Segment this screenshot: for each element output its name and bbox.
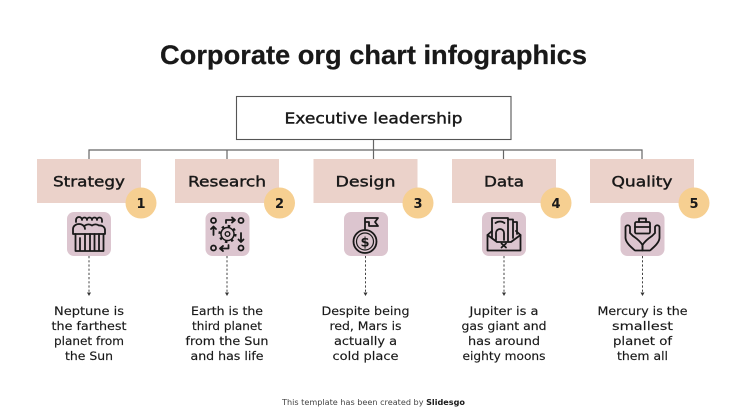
arrow (502, 256, 506, 296)
quality heading: Quality (612, 174, 673, 190)
description (186, 305, 268, 363)
description: Earth is the (191, 305, 263, 318)
icon: process gear (206, 212, 250, 256)
badge 2 (264, 188, 295, 218)
arrow (87, 256, 91, 296)
panel: design (314, 159, 434, 363)
description: and has life (190, 350, 264, 363)
description: actually a (334, 335, 397, 348)
strategy heading (37, 159, 141, 203)
description: them all (617, 350, 668, 363)
panel: research (175, 159, 295, 363)
description: Jupiter is a (468, 305, 538, 318)
description: the farthest (52, 320, 127, 333)
description (462, 305, 546, 363)
icon: open envelope with documents (482, 212, 526, 256)
panel: data (452, 159, 572, 363)
description: red, Mars is (330, 320, 402, 333)
panel: quality (590, 159, 710, 363)
arrow (364, 256, 368, 296)
description: Mercury is the (598, 305, 688, 318)
description: has around (468, 335, 540, 348)
badge 4: 4 (551, 197, 561, 212)
description (322, 305, 410, 363)
research heading: Research (188, 174, 266, 190)
description: third planet (192, 320, 263, 333)
badge 3 (402, 188, 434, 218)
executive leadership box (236, 96, 511, 140)
badge 4 (540, 188, 572, 218)
strategy heading: Strategy (53, 174, 125, 190)
icon: crowd of people (67, 212, 111, 256)
description (52, 305, 127, 363)
quality heading (590, 159, 694, 203)
description: smallest (612, 320, 674, 333)
description: gas giant and (462, 320, 546, 333)
footer credit: This template has been created by Slidesgo (281, 398, 465, 407)
badge 1 (126, 188, 156, 218)
executive leadership box: Executive leadership (284, 110, 462, 128)
design heading (314, 159, 418, 203)
icon: hands holding briefcase (620, 212, 664, 256)
connector lines (89, 139, 642, 159)
badge 2: 2 (275, 197, 284, 212)
badge 5: 5 (689, 197, 699, 212)
description: eighty moons (462, 350, 546, 363)
description: Despite being (322, 305, 410, 318)
description: Neptune is (54, 305, 124, 318)
design heading: Design (336, 174, 396, 190)
arrow (640, 256, 644, 296)
description: planet of (613, 335, 673, 348)
arrow (225, 256, 229, 296)
badge 3: 3 (413, 197, 423, 212)
badge 1: 1 (136, 197, 146, 212)
description: from the Sun (186, 335, 268, 348)
title: Corporate org chart infographics (160, 40, 587, 70)
icon: money bag with flag (344, 212, 388, 256)
description: the Sun (65, 350, 113, 363)
panel: strategy (37, 159, 156, 363)
data heading (452, 159, 556, 203)
data heading: Data (484, 174, 524, 190)
research heading (175, 159, 279, 203)
description: cold place (332, 350, 399, 363)
badge 5 (678, 188, 710, 218)
icon: money bag with flag: $ (360, 236, 370, 250)
description: planet from (54, 335, 124, 348)
description (598, 305, 688, 363)
